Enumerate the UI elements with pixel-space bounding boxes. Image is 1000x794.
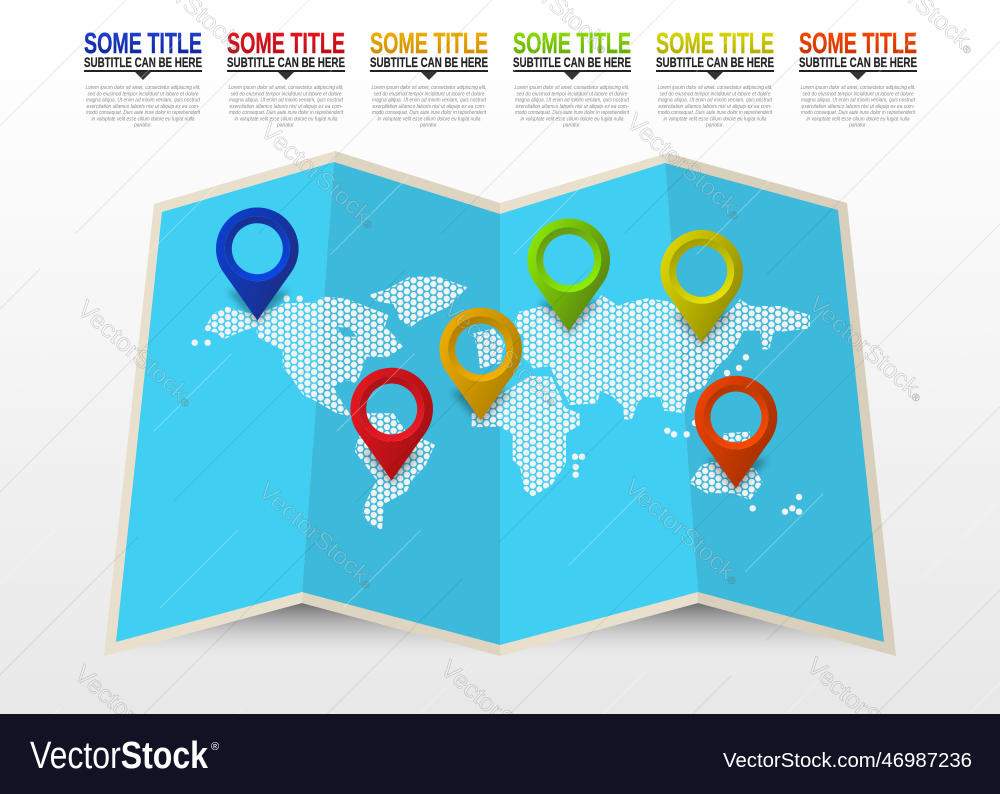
heading column 1: blue title: SUBTITLE CAN BE HERE — [84, 54, 202, 70]
heading column 6: orange title: sed do eiusmod tempor incididunt ut labore et dolore — [802, 91, 914, 97]
heading column 3: gold title: sed do eiusmod tempor incididunt ut labore et dolore — [374, 91, 484, 97]
heading column 1: blue title: magna aliqua. Ut enim ad minim veniam, quis nostrud — [86, 98, 201, 104]
heading column 4: green title: SUBTITLE CAN BE HERE — [513, 54, 631, 70]
footer bar — [0, 714, 1000, 794]
heading column 5: yellow title: magna aliqua. Ut enim ad minim veniam, quis nostrud — [658, 98, 773, 104]
heading column 3: gold title: exercitation ullamco laboris nisi ut aliquip ex ea com- — [372, 104, 486, 110]
heading column 4: green title: magna aliqua. Ut enim ad minim veniam, quis nostrud — [515, 98, 630, 104]
footer url: VectorStock.com/46987236 — [723, 750, 972, 772]
heading column 2: red title: magna aliqua. Ut enim ad minim veniam, quis nostrud — [229, 98, 344, 104]
heading column 3: gold title: in voluptate velit esse cillum dolore eu fugiat nulla — [378, 116, 480, 122]
heading column 3: gold title: SOME TITLE — [370, 28, 488, 60]
pin: red — [350, 368, 433, 485]
heading column 1: blue title: pariatur. — [133, 123, 152, 129]
heading column 5: yellow title — [656, 28, 774, 129]
heading column 2: red title — [227, 28, 345, 129]
map shadow under folds — [104, 603, 896, 656]
heading column 5: yellow title: pariatur. — [705, 123, 724, 129]
heading column 1: blue title: exercitation ullamco laboris nisi ut aliquip ex ea com- — [86, 104, 200, 110]
heading column 6: orange title: modo consequat. Duis aute irure dolor in reprehenderit — [801, 110, 915, 116]
registered mark: ® — [211, 741, 219, 753]
dotted world map — [192, 276, 810, 530]
heading column 6: orange title: SUBTITLE CAN BE HERE — [799, 54, 917, 70]
heading column 3: gold title: modo consequat. Duis aute irure dolor in reprehenderit — [372, 110, 486, 116]
map paper border — [104, 151, 896, 656]
heading column 1: blue title — [84, 28, 202, 129]
heading column 2: red title: exercitation ullamco laboris nisi ut aliquip ex ea com- — [230, 104, 343, 110]
heading column 4: green title: modo consequat. Duis aute irure dolor in reprehenderit — [515, 110, 629, 116]
watermarks: VectorStock® — [72, 295, 200, 412]
heading column 2: red title: pariatur. — [276, 123, 295, 129]
heading column 2: red title: SOME TITLE — [227, 28, 345, 60]
heading column 6: orange title: SOME TITLE — [799, 28, 917, 60]
pin: blue — [216, 207, 299, 325]
pin: orange — [695, 376, 777, 493]
heading column 1: blue title: Lorem ipsum dolor sit amet, consectetur adipiscing elit, — [86, 85, 200, 91]
heading column 3: gold title: SUBTITLE CAN BE HERE — [370, 54, 488, 70]
heading column 5: yellow title: sed do eiusmod tempor incididunt ut labore et dolore — [660, 91, 770, 97]
heading column 6: orange title: pariatur. — [848, 123, 867, 129]
heading column 4: green title: sed do eiusmod tempor incididunt ut labore et dolore — [516, 91, 628, 97]
heading column 4: green title: SOME TITLE — [513, 28, 631, 60]
heading column 6: orange title: Lorem ipsum dolor sit amet, consectetur adipiscing elit, — [800, 85, 916, 91]
heading column 4: green title: Lorem ipsum dolor sit amet, consectetur adipiscing elit, — [514, 85, 630, 91]
watermarks: VectorStock® — [621, 108, 749, 225]
heading column 6: orange title: exercitation ullamco laboris nisi ut aliquip ex ea com- — [802, 104, 915, 110]
heading column 2: red title: sed do eiusmod tempor incididunt ut labore et dolore — [230, 91, 342, 97]
footer logo: VectorStock — [30, 735, 209, 777]
heading column 2: red title: modo consequat. Duis aute irure dolor in reprehenderit — [229, 110, 343, 116]
watermarks: VectorStock® — [253, 477, 381, 594]
heading column 5: yellow title: SUBTITLE CAN BE HERE — [656, 54, 774, 70]
watermarks: VectorStock® — [801, 652, 929, 769]
heading column 4: green title: exercitation ullamco laboris nisi ut aliquip ex ea com- — [516, 104, 629, 110]
heading column 5: yellow title: in voluptate velit esse cillum dolore eu fugiat nulla — [664, 116, 766, 122]
watermarks: VectorStock® — [803, 290, 931, 407]
heading column 1: blue title: SOME TITLE — [84, 28, 202, 60]
heading column 2: red title: Lorem ipsum dolor sit amet, consectetur adipiscing elit, — [228, 85, 344, 91]
heading column 1: blue title: sed do eiusmod tempor incididunt ut labore et dolore — [88, 91, 198, 97]
heading column 5: yellow title: exercitation ullamco laboris nisi ut aliquip ex ea com- — [658, 104, 772, 110]
heading column 3: gold title: Lorem ipsum dolor sit amet, consectetur adipiscing elit, — [372, 85, 486, 91]
heading column 3: gold title: magna aliqua. Ut enim ad minim veniam, quis nostrud — [372, 98, 487, 104]
pin: gold — [439, 308, 522, 425]
pin: yellow — [660, 230, 743, 347]
heading column 1: blue title: in voluptate velit esse cillum dolore eu fugiat nulla — [92, 116, 194, 122]
heading column 6: orange title: in voluptate velit esse cillum dolore eu fugiat nulla — [806, 116, 910, 122]
heading column 3: gold title: pariatur. — [419, 123, 438, 129]
heading column 5: yellow title: Lorem ipsum dolor sit amet, consectetur adipiscing elit, — [658, 85, 772, 91]
heading column 2: red title: in voluptate velit esse cillum dolore eu fugiat nulla — [234, 116, 338, 122]
watermarks: VectorStock® — [619, 473, 747, 590]
heading column 2: red title: SUBTITLE CAN BE HERE — [227, 54, 345, 70]
heading column 4: green title — [513, 28, 631, 129]
watermarks: VectorStock® — [69, 660, 197, 777]
watermarks: VectorStock® — [438, 295, 566, 412]
heading column 4: green title: in voluptate velit esse cillum dolore eu fugiat nulla — [520, 116, 624, 122]
heading column 5: yellow title: modo consequat. Duis aute irure dolor in reprehenderit — [658, 110, 772, 116]
watermarks: VectorStock® — [255, 117, 383, 234]
map blue panels — [116, 162, 884, 645]
heading column 5: yellow title: SOME TITLE — [656, 28, 774, 60]
heading column 3: gold title — [370, 28, 488, 129]
heading column 4: green title: pariatur. — [562, 123, 581, 129]
watermarks: VectorStock® — [435, 655, 563, 772]
heading column 6: orange title — [799, 28, 917, 129]
heading column 6: orange title: magna aliqua. Ut enim ad minim veniam, quis nostrud — [801, 98, 916, 104]
pin: green — [527, 218, 610, 336]
heading column 1: blue title: modo consequat. Duis aute irure dolor in reprehenderit — [86, 110, 200, 116]
folded map — [104, 151, 896, 656]
